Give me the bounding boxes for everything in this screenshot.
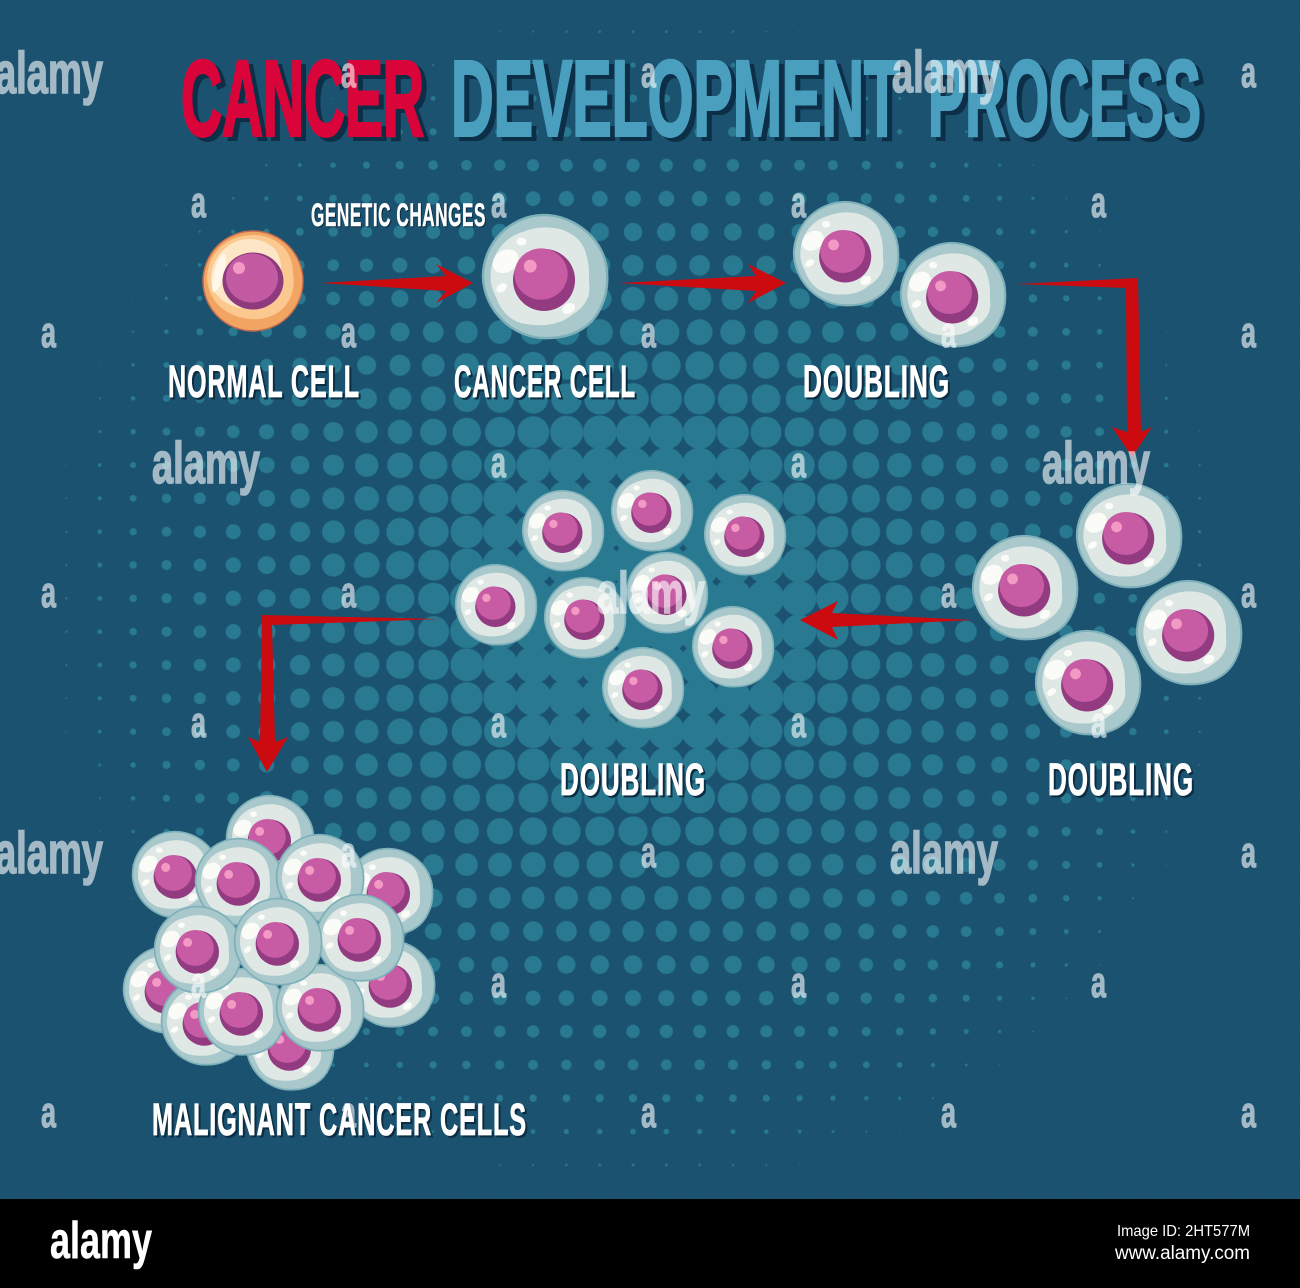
watermark: small a marks: a [1091,958,1106,1007]
footer image id: Image ID: 2HT577M [1117,1223,1250,1240]
label: genetic changes: GENETIC CHANGES [311,197,486,233]
watermark: small a marks: a [791,698,806,747]
watermark: small a marks: a [641,828,656,877]
watermark: small a marks: a [191,698,206,747]
watermark: small a marks: a [1241,48,1256,97]
watermark: alamy words: alamy [890,821,998,886]
footer logo: alamy: alamy [50,1212,152,1270]
watermark: small a marks: a [791,438,806,487]
arrow: normal cell to cancer cell [320,264,473,303]
watermark: small a marks: a [41,568,56,617]
watermark: small a marks: a [41,308,56,357]
icon: four cells doubling [973,484,1241,734]
watermark: small a marks: a [491,698,506,747]
watermark: small a marks: a [491,438,506,487]
watermark: small a marks: a [1241,568,1256,617]
watermark: small a marks: a [341,828,356,877]
watermark: alamy words: alamy [1042,431,1150,496]
watermark: alamy words: alamy [892,40,1000,105]
watermark: small a marks [41,48,1256,1137]
watermark: small a marks: a [341,568,356,617]
watermark: small a marks: a [1241,308,1256,357]
watermark: small a marks: a [791,958,806,1007]
title: DEVELOPMENT [451,38,900,158]
footer bar [0,1199,1300,1288]
icon: cancer cell [483,215,607,338]
watermark: small a marks: a [191,178,206,227]
watermark: alamy words: alamy [597,561,705,626]
footer website: www.alamy.com [1114,1243,1250,1264]
label: normal cell: NORMAL CELL [168,356,360,407]
watermark: small a marks: a [491,958,506,1007]
watermark: small a marks: a [41,1088,56,1137]
watermark: small a marks: a [641,1088,656,1137]
watermark: small a marks: a [1241,828,1256,877]
watermark: small a marks: a [641,48,656,97]
watermark: small a marks: a [941,1088,956,1137]
label: doubling four cells: DOUBLING [1048,754,1194,805]
watermark: alamy words [0,40,1150,886]
watermark: alamy words: alamy [152,431,260,496]
icon: normal cell [203,231,303,331]
title: CANCER [181,38,424,158]
arrow: cancer cell to doubling [618,264,786,303]
watermark: small a marks: a [1091,698,1106,747]
watermark: small a marks: a [341,48,356,97]
title [181,38,1201,158]
arrow: four cells to eight cells [800,601,973,640]
watermark: small a marks: a [191,958,206,1007]
watermark: small a marks: a [341,308,356,357]
label: doubling eight cells: DOUBLING [560,754,706,805]
watermark: small a marks: a [341,1088,356,1137]
watermark: small a marks: a [1241,1088,1256,1137]
label: malignant cancer cells: MALIGNANT CANCER CELLS [152,1094,527,1145]
watermark: small a marks: a [791,178,806,227]
watermark: small a marks: a [491,178,506,227]
arrow: eight cells down to malignant cluster [248,615,440,772]
watermark: small a marks: a [641,308,656,357]
label: doubling two cells: DOUBLING [803,356,950,407]
icon: eight cells doubling [456,471,785,728]
label: cancer cell: CANCER CELL [454,356,636,407]
icon: malignant cancer cell cluster [124,796,435,1090]
arrow: doubling down to four cells [1016,278,1152,457]
watermark: small a marks: a [1091,178,1106,227]
watermark: small a marks: a [941,568,956,617]
icon: two cells doubling [794,202,1005,346]
watermark: small a marks: a [941,308,956,357]
